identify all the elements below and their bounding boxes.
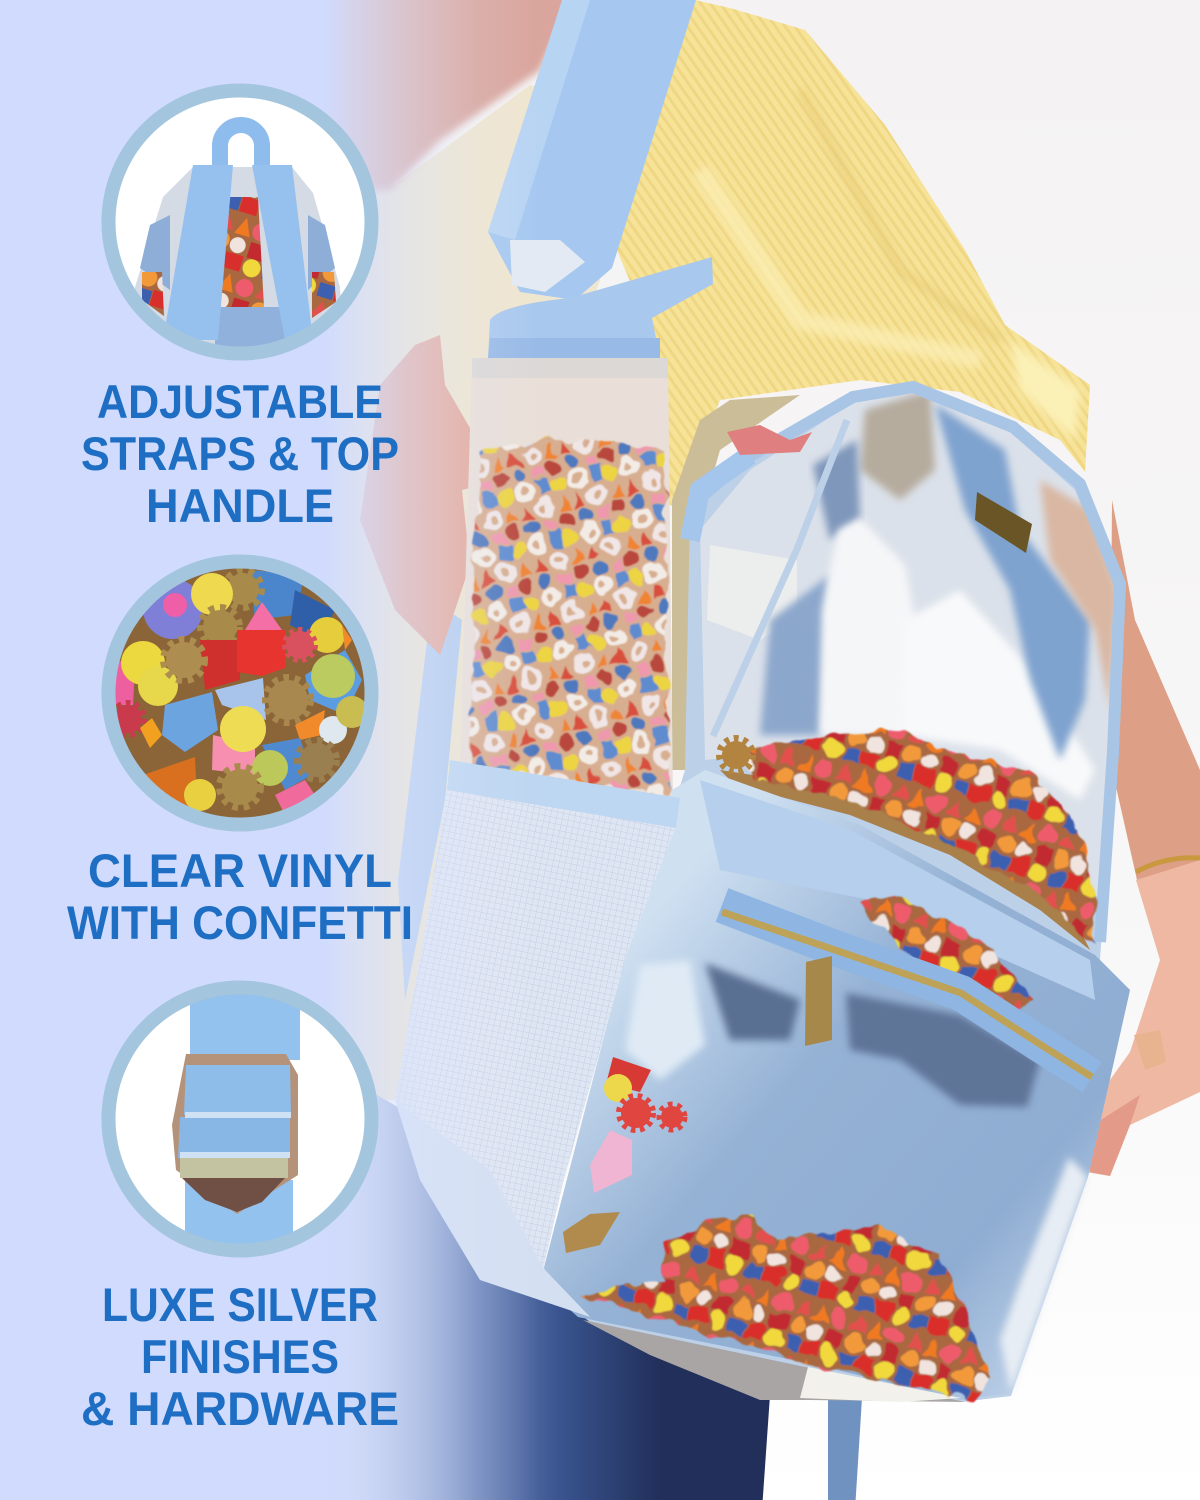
- top clear window: [700, 392, 1115, 900]
- bottom base: [583, 1320, 965, 1402]
- blue lining: [935, 404, 1090, 760]
- buckle and webbing: [172, 990, 300, 1250]
- heading: adjustable straps: [81, 375, 399, 532]
- top handle: [220, 125, 262, 165]
- light left reflection: [707, 545, 797, 640]
- bottle lid and spout: [488, 257, 713, 358]
- lower left confetti: [563, 1057, 683, 1253]
- heading: clear vinyl: [67, 844, 413, 949]
- mid confetti band: [740, 729, 1097, 945]
- heading: luxe silver: & HARDWARE: [81, 1382, 399, 1435]
- heading: adjustable straps: STRAPS & TOP: [81, 427, 399, 480]
- person: jeans: [300, 1050, 770, 1500]
- heading: luxe silver: FINISHES: [141, 1330, 339, 1383]
- side confetti right: [312, 272, 336, 318]
- white patch right: [900, 590, 1095, 800]
- front pocket lining: [540, 770, 1130, 1400]
- dark reflection left: [705, 963, 800, 1040]
- brand tag: [975, 492, 1032, 553]
- side zipper band: [690, 455, 750, 540]
- dark reflection right: [846, 993, 1040, 1107]
- gold zipper: [722, 912, 1092, 1077]
- confetti panel: [216, 197, 264, 307]
- top confetti peek: [727, 425, 812, 455]
- buckle frame: [172, 1054, 298, 1214]
- bottle confetti: [470, 440, 668, 795]
- ring: [108, 562, 372, 824]
- heading: clear vinyl: WITH CONFETTI: [67, 896, 413, 949]
- backpack: shoulder straps: [398, 0, 862, 1500]
- sequins: [114, 570, 368, 820]
- satin highlight: [180, 1112, 291, 1158]
- satin band upper: [184, 1065, 291, 1115]
- person: neck and shoulder: [300, 0, 585, 190]
- bottle body: [460, 362, 673, 800]
- right strap: [252, 165, 313, 340]
- upper pocket highlight: [700, 780, 1095, 1000]
- silver plate: [182, 1178, 285, 1212]
- gold star: [722, 741, 750, 769]
- side confetti left: [142, 272, 164, 316]
- feature circle: straps and handle: [108, 90, 372, 360]
- right lower clear panel: [1000, 1157, 1088, 1393]
- feature circle: silver hardware: [108, 988, 372, 1250]
- tan reflection: [860, 390, 935, 500]
- mesh side pocket: [395, 760, 680, 1317]
- heading: luxe silver: [81, 1278, 399, 1435]
- heading: luxe silver: LUXE SILVER: [102, 1278, 378, 1331]
- clear body: [135, 167, 340, 344]
- pocket confetti: [860, 895, 1035, 1015]
- outer shell: [540, 382, 1130, 1402]
- ring: [108, 988, 372, 1250]
- lower webbing: [185, 1180, 293, 1250]
- dark left reflection: [760, 575, 830, 735]
- grey blue fold: [813, 440, 860, 540]
- bottom confetti pile: [582, 1217, 992, 1400]
- backpack rear view: [135, 125, 345, 360]
- top rim binding: [693, 387, 1120, 942]
- satin band lower: [178, 1117, 290, 1158]
- zipper pull: [805, 956, 832, 1046]
- water bottle: [460, 257, 713, 800]
- inner seam: [713, 420, 847, 736]
- lower lining: [215, 307, 285, 346]
- white patch left: [820, 518, 915, 735]
- heading: adjustable straps: ADJUSTABLE: [97, 375, 383, 428]
- left colour fade panel: [0, 0, 540, 1500]
- zipper tape: [722, 905, 1092, 1077]
- person: right arm and hand: [1074, 500, 1200, 1176]
- person: cream torso: [300, 85, 620, 1100]
- upper webbing: [190, 990, 300, 1060]
- ring: [108, 90, 372, 354]
- person: yellow sweater: [612, 0, 1090, 770]
- heading: clear vinyl: CLEAR VINYL: [88, 844, 392, 897]
- person: left hand holding bottle: [360, 335, 542, 655]
- backpack body: [540, 382, 1130, 1402]
- khaki band: [180, 1158, 288, 1178]
- white highlight left: [625, 960, 705, 1080]
- skin seen through vinyl: [1040, 480, 1118, 710]
- heading: adjustable straps: HANDLE: [146, 479, 334, 532]
- gold glitter layer: [720, 770, 1090, 950]
- blue side panels: [140, 215, 335, 290]
- feature circle: confetti close-up: [108, 562, 372, 824]
- left strap: [163, 165, 233, 340]
